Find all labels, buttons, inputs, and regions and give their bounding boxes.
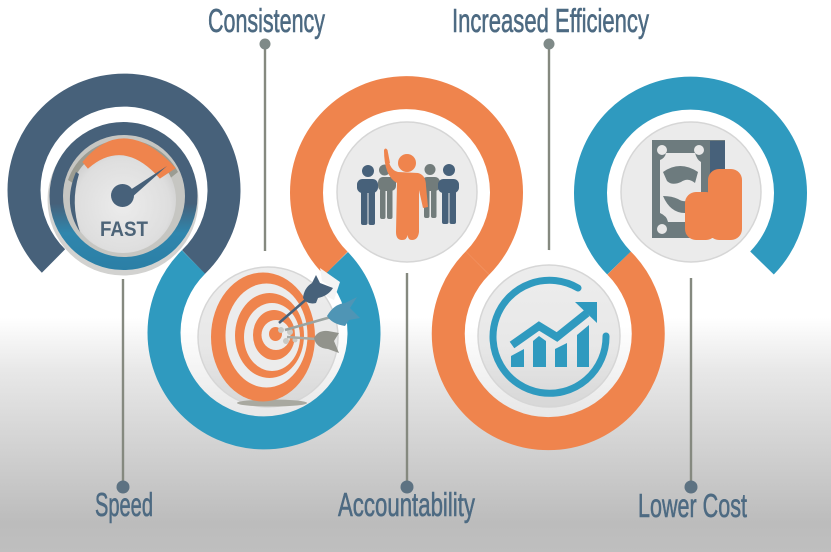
label: Accountability: Accountability: [338, 486, 475, 523]
icon: target with darts: [198, 267, 360, 407]
chart trend arrow: [512, 302, 597, 345]
gauge band: [50, 122, 198, 270]
person: gray right: [422, 164, 440, 218]
target ground shadow: [237, 400, 307, 406]
ribbon: orange chart ring: [448, 263, 648, 434]
icon: speedometer: [48, 122, 198, 276]
connector lines and dots: [116, 38, 698, 494]
target disk: [198, 267, 338, 407]
chart circular arrow: [493, 280, 606, 393]
label: Increased Efficiency: Increased Efficiency: [452, 2, 649, 39]
ribbon: navy speed ring: [24, 90, 224, 262]
icon: growth chart: [478, 265, 620, 407]
person: navy right: [438, 164, 459, 224]
label: Consistency: Consistency: [208, 2, 325, 39]
ribbon: blue target ring: [164, 262, 364, 433]
team disk: [337, 122, 477, 262]
gauge dial rim: [63, 135, 185, 257]
ribbon: blue money ring: [590, 93, 790, 263]
label: Speed: Speed: [95, 486, 153, 523]
dart: gray: [287, 331, 339, 353]
line: speed: [116, 279, 130, 494]
banknote: [652, 140, 725, 238]
icon: money and coins: [621, 122, 761, 262]
label: Lower Cost: Lower Cost: [638, 487, 747, 524]
person: orange leader: [384, 148, 428, 240]
icon: team with leader: [337, 122, 477, 262]
person: gray left: [378, 164, 396, 219]
dart: navy: [279, 268, 340, 323]
line: consistency: [260, 38, 270, 253]
gauge dial upper shade: [68, 140, 178, 185]
chart bars: [511, 325, 589, 367]
gauge dark crescent: [70, 172, 80, 232]
coins: [685, 169, 742, 240]
line: increased efficiency: [544, 38, 554, 253]
gauge dial face: [70, 147, 176, 253]
gauge shadow rim: [48, 124, 198, 276]
target rings: [211, 272, 315, 402]
gauge label: FAST: [100, 218, 148, 241]
dart tips: [278, 327, 298, 344]
inner halo fills: [181, 250, 632, 419]
line: lower cost: [684, 278, 698, 494]
dart: blue: [285, 297, 360, 330]
money disk: [621, 122, 761, 262]
gauge hub: [111, 184, 134, 207]
chart disk: [478, 265, 620, 407]
ribbon: orange team ring: [307, 93, 507, 264]
gauge orange speed arc: [83, 139, 175, 178]
gauge needle: [127, 166, 167, 199]
person: navy left: [357, 165, 378, 225]
line: accountability: [400, 273, 414, 494]
